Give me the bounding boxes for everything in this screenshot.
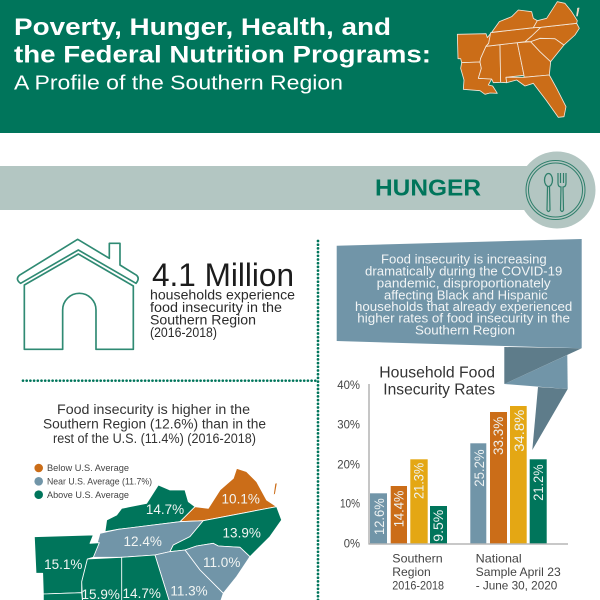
bars: national sample [470, 406, 547, 543]
category labels: - June 30, 2020 [476, 578, 558, 592]
y axis labels: 10% [340, 497, 360, 511]
state rate labels: 11.0% [203, 555, 240, 570]
map intro text: Food insecurity is higher in the [57, 402, 250, 417]
category labels: Sample April 23 [476, 565, 561, 579]
bars: southern region: 12.6% [372, 498, 387, 535]
category labels: Region [392, 565, 431, 579]
stat: 4.1 million households: food insecurity in the [150, 300, 282, 315]
bars: southern region: 14.4% [392, 491, 406, 527]
y axis labels: 40% [337, 378, 360, 392]
y axis labels: 0% [344, 536, 360, 550]
state rate labels: 14.7% [146, 502, 184, 517]
stat: 4.1 million households: (2016-2018) [150, 325, 217, 340]
y axis labels [337, 378, 360, 550]
icon: house [17, 239, 138, 349]
state rate labels: 13.9% [223, 526, 261, 541]
category labels: 2016-2018 [392, 578, 444, 592]
callout text: Food insecurity is increasing [381, 251, 547, 266]
map intro text: Southern Region (12.6%) than in the [43, 417, 266, 432]
callout text [355, 251, 572, 337]
map legend: Below U.S. Average [47, 463, 129, 473]
icon: plate with spoon and fork [526, 160, 585, 220]
stat: 4.1 million households: 4.1 Million [152, 257, 294, 293]
section heading: HUNGER [375, 174, 481, 200]
icon: southern region map [457, 2, 579, 117]
title [14, 14, 431, 94]
callout text: Southern Region [415, 322, 515, 337]
callout text: pandemic, disproportionately [377, 276, 551, 291]
section band: hunger [0, 152, 596, 228]
callout ribbon [337, 239, 582, 450]
chart title: Household Food [379, 364, 495, 381]
stat: 4.1 million households [150, 257, 295, 340]
bars: southern region: 9.5% [431, 510, 446, 542]
map legend: Near U.S. Average (11.7%) [47, 476, 152, 486]
state rate labels: 15.1% [44, 557, 82, 572]
map intro text [43, 402, 266, 446]
callout text: affecting Black and Hispanic [384, 287, 548, 302]
callout text: households that already experienced [355, 299, 572, 314]
bars: southern region: 21.3% [412, 463, 426, 499]
callout text: dramatically during the COVID-19 [365, 264, 562, 279]
category labels [392, 551, 561, 592]
bars: southern region [370, 459, 447, 543]
title: A Profile of the Southern Region [14, 72, 343, 94]
title: Poverty, Hunger, Health, and [14, 14, 391, 41]
stat: 4.1 million households: households experience [150, 288, 295, 302]
map legend: Above U.S. Average [47, 490, 129, 500]
callout text: higher rates of food insecurity in the [357, 311, 570, 326]
bars: national sample: 21.2% [531, 464, 546, 501]
stat: 4.1 million households: Southern Region [150, 312, 256, 328]
state rate labels [44, 492, 261, 600]
bars: national sample: 33.3% [491, 417, 506, 455]
category labels: Southern [392, 551, 443, 565]
bar chart: household food insecurity rates [337, 364, 568, 592]
choropleth map of southern states [34, 468, 282, 600]
state rate labels: 11.3% [170, 584, 208, 598]
state rate labels: 12.4% [124, 534, 162, 549]
category labels: National [476, 551, 522, 565]
bars: national sample: 34.8% [512, 410, 527, 452]
map intro text: rest of the U.S. (11.4%) (2016-2018) [53, 431, 256, 446]
chart title [379, 364, 495, 398]
state rate labels: 10.1% [222, 492, 260, 506]
y axis labels: 30% [337, 417, 360, 431]
map legend [34, 463, 152, 500]
bars: national sample: 25.2% [472, 449, 487, 487]
chart title: Insecurity Rates [383, 381, 495, 398]
header banner [0, 0, 600, 133]
title: the Federal Nutrition Programs: [14, 42, 431, 68]
y axis labels: 20% [337, 458, 360, 472]
